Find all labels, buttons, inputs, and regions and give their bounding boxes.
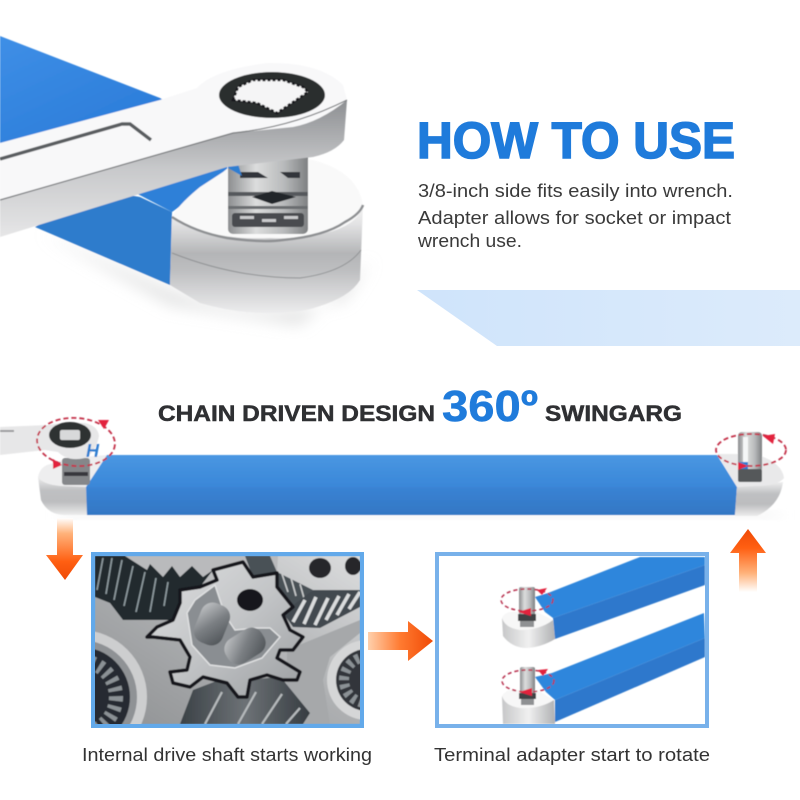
heading: how to use: HOW TO USE: [417, 112, 735, 169]
bar shadow: [60, 512, 780, 518]
instructions text: Adapter allows for socket or impact: [418, 207, 731, 228]
top dark teeth: [244, 556, 314, 606]
central gear: [147, 562, 303, 697]
gear photo: [95, 556, 360, 724]
gear hub cutaway: [187, 585, 280, 669]
left silver head: [38, 455, 107, 515]
blue bar lower faces: [35, 160, 228, 285]
dark helical gear: [95, 556, 213, 620]
instructions text: 3/8-inch side fits easily into wrench.: [418, 180, 733, 201]
arrow: orange up: [730, 529, 766, 592]
arrow: orange right: [368, 621, 433, 661]
arrow: orange down: [46, 518, 83, 580]
section title: chain driven design: 360º: [442, 382, 538, 431]
upper bar: [535, 557, 705, 639]
blue bar upper face: [0, 36, 240, 150]
product photo: wrench on socket adapter: [0, 36, 372, 325]
top right plate holes: [309, 558, 331, 578]
ratchet hole: [219, 72, 325, 118]
section title: chain driven design: CHAIN DRIVEN DESIGN: [158, 401, 435, 426]
small wrench on left head: H: [86, 441, 100, 461]
lower silver head: [502, 667, 555, 724]
caption: internal drive shaft: Internal drive shaft starts working: [82, 745, 372, 765]
blue bar: [86, 455, 737, 515]
upper silver head: [502, 587, 555, 648]
section title: chain driven design: SWINGARG: [545, 401, 682, 426]
decorative light blue band: [417, 290, 800, 346]
instructions text: [417, 180, 733, 251]
ratchet socket post: [228, 150, 308, 234]
rotation arrow: left: [35, 415, 117, 469]
panel: internal gears: [91, 552, 364, 728]
silver swing head: [170, 150, 363, 313]
gear key hole: [237, 589, 263, 611]
bottom dark shafts: [180, 677, 310, 724]
right silver plate: [287, 620, 360, 696]
section title: chain driven design: [158, 382, 682, 431]
panel: terminal adapter: [435, 552, 709, 728]
square drive adapter: [738, 432, 762, 472]
rotation arrow: right: [716, 434, 786, 470]
small wrench on left head: [0, 422, 100, 485]
upper rotation arrow: [501, 588, 553, 616]
ground shadow: [40, 232, 372, 325]
instructions text: wrench use.: [417, 230, 522, 251]
long swing bar tool: [0, 415, 786, 518]
right helical rack: [283, 590, 360, 628]
top silver gear: [210, 556, 278, 570]
caption: terminal adapter: Terminal adapter start to rotate: [434, 745, 710, 765]
ratchet wrench: [0, 63, 347, 237]
lower bar: [535, 613, 705, 722]
right ratchet ring: [326, 640, 360, 720]
right silver head: [717, 432, 784, 516]
lower rotation arrow: [502, 669, 554, 696]
left ratchet ring: [95, 631, 148, 724]
